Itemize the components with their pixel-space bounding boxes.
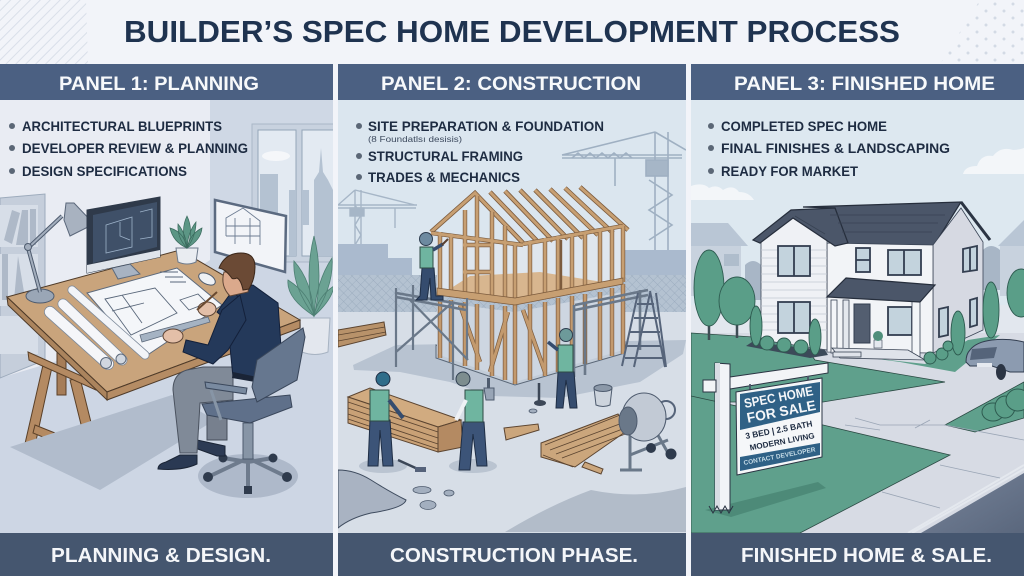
house left wing siding — [761, 218, 827, 350]
header: panel 2: PANEL 2: CONSTRUCTION — [381, 74, 641, 95]
clouds — [691, 148, 1024, 200]
panel: planning — [0, 64, 338, 576]
shingle lines — [795, 215, 945, 234]
floor shadows — [10, 395, 298, 498]
caption: panel 3 — [691, 533, 1024, 576]
designer torso and arms — [163, 285, 281, 384]
roof right eave — [961, 202, 990, 240]
title: BUILDER’S SPEC HOME DEVELOPMENT PROCESS — [124, 15, 900, 49]
bullets: panel 2: (8 Foundatlsı desisis) — [368, 135, 462, 144]
panel: finished home — [691, 64, 1024, 576]
ruler — [140, 317, 210, 342]
sign contact line: CONTACT DEVELOPER — [743, 446, 816, 467]
designer head — [219, 253, 255, 296]
garden bed — [746, 342, 828, 358]
worker left with strap — [359, 372, 407, 473]
sign details — [745, 418, 815, 453]
worker right with timber — [449, 372, 497, 473]
floor platform — [437, 278, 623, 305]
curb and sidewalk joints — [908, 465, 1024, 533]
porch posts and step — [831, 300, 925, 360]
caption: panel 2: CONSTRUCTION PHASE. — [390, 545, 638, 567]
pot plant on floor — [288, 236, 334, 354]
upper lawn — [691, 333, 945, 402]
sidewalk joints — [845, 418, 1024, 508]
caption: panel 2 — [338, 533, 686, 576]
left timber pile — [338, 322, 386, 347]
wall blueprint frame — [215, 200, 286, 272]
bullets: panel 2: STRUCTURAL FRAMING — [368, 148, 523, 164]
planning illustration — [0, 100, 338, 533]
panel: construction — [338, 64, 686, 576]
bullets: panel 1 — [9, 118, 248, 179]
lower lawn — [691, 396, 950, 533]
mouse — [198, 272, 216, 286]
blueprint rolls — [50, 290, 145, 368]
scaffolding — [396, 285, 648, 380]
road — [921, 473, 1024, 533]
siding lines — [761, 250, 827, 330]
second timber pile — [541, 414, 628, 474]
house mid wall — [827, 243, 933, 353]
front door — [854, 304, 870, 343]
background houses — [691, 220, 1024, 300]
house roof main — [803, 202, 961, 247]
sign details: MODERN LIVING — [749, 431, 815, 452]
caption: panel 3: FINISHED HOME & SALE. — [741, 545, 992, 567]
sign shadow — [705, 482, 826, 517]
desk lamp — [24, 203, 94, 303]
door planter — [873, 331, 883, 348]
distant buildings — [338, 244, 686, 278]
bookshelf — [0, 194, 45, 378]
right lawn — [945, 382, 1024, 432]
roof rafters — [431, 187, 628, 243]
bullets: panel 3: READY FOR MARKET — [721, 163, 858, 179]
bullets: panel 2: SITE PREPARATION & FOUNDATION — [368, 118, 604, 134]
worker on scaffold — [416, 232, 448, 300]
porch roof — [827, 278, 935, 302]
paint bucket — [594, 384, 612, 406]
bullets: panel 3: FINAL FINISHES & LANDSCAPING — [721, 140, 950, 156]
decorative dots top right — [940, 0, 1024, 64]
sign headline: SPEC HOME — [743, 383, 815, 411]
designer legs — [158, 367, 233, 469]
lower studs — [440, 284, 623, 384]
ground rocks — [413, 409, 537, 510]
bullets: panel 3: COMPLETED SPEC HOME — [721, 118, 887, 134]
upper studs — [431, 196, 623, 304]
chair seat and back — [202, 328, 305, 423]
header: panel 3 — [691, 64, 1024, 100]
chain link fence — [338, 275, 686, 312]
bullets: panel 1: DEVELOPER REVIEW & PLANNING — [22, 140, 248, 156]
timber stack — [348, 388, 463, 452]
header: panel 2 — [338, 64, 686, 100]
trees — [694, 250, 1024, 364]
header: panel 1: PANEL 1: PLANNING — [59, 74, 259, 95]
bullets: panel 2 — [356, 118, 604, 185]
sign headline — [743, 383, 817, 426]
bullets: panel 1: DESIGN SPECIFICATIONS — [22, 163, 187, 179]
drafting desk — [7, 250, 300, 400]
worker at wall — [548, 328, 577, 408]
left tower crane — [338, 190, 417, 245]
computer monitor — [87, 197, 160, 279]
header: panel 3: PANEL 3: FINISHED HOME — [734, 74, 995, 95]
right tower crane — [562, 132, 686, 250]
for sale sign post — [703, 363, 828, 513]
cement mixer — [619, 393, 676, 470]
bullets: panel 2: TRADES & MECHANICS — [368, 169, 520, 185]
caption: panel 1: PLANNING & DESIGN. — [51, 545, 271, 567]
ladder — [622, 291, 666, 367]
construction illustration — [338, 100, 686, 533]
parked car — [966, 339, 1024, 380]
desk legs — [24, 351, 195, 442]
header: panel 1 — [0, 64, 333, 100]
office window — [252, 124, 338, 262]
bullets: panel 3 — [708, 118, 950, 179]
decorative hatching top left — [0, 0, 88, 64]
house side wall — [933, 208, 983, 353]
bullets: panel 1: ARCHITECTURAL BLUEPRINTS — [22, 118, 222, 134]
desk plant — [170, 216, 202, 264]
background fences — [691, 305, 1024, 335]
finished home illustration — [691, 100, 1024, 533]
lawn strip by driveway — [862, 335, 1000, 372]
right bush — [982, 389, 1024, 421]
timber house frame — [431, 187, 628, 384]
dirt patches — [338, 340, 686, 532]
house gable roof — [753, 208, 848, 246]
hammer and tools — [398, 378, 546, 472]
caption: panel 1 — [0, 533, 333, 576]
chair base — [203, 423, 292, 494]
house windows — [778, 246, 977, 337]
blueprint sheet — [87, 268, 222, 358]
foundation slab — [436, 342, 625, 385]
lawn and sidewalk base — [691, 333, 1024, 533]
sign headline: FOR SALE — [745, 397, 817, 426]
sign details: 3 BED | 2.5 BATH — [745, 418, 813, 441]
hands and pencil — [163, 292, 217, 343]
for sale sign board — [736, 378, 822, 475]
